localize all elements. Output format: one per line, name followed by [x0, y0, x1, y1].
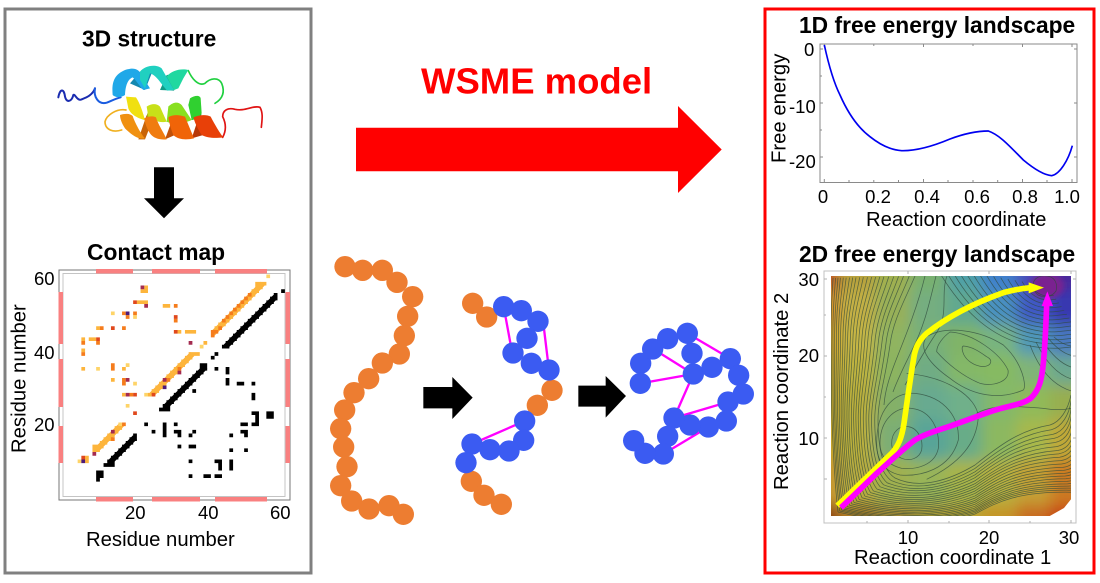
contacts, purple cells [83, 313, 165, 461]
panel: free energy landscapes [738, 9, 1100, 573]
contacts, orange cells [83, 295, 250, 439]
heading: 1D free energy landscape: 1D free energy landscape [799, 12, 1075, 38]
contacts, amber cells [83, 284, 265, 461]
contact map axis labels: 60 [270, 502, 291, 523]
arrow: WSME model big red arrow [356, 106, 722, 193]
1D chart axis labels: 0.8 [1012, 186, 1038, 207]
protein ribbon 3D structure [58, 66, 262, 139]
contacts, light yellow cells [80, 276, 268, 461]
1D chart axis labels: 0.4 [914, 186, 940, 207]
2D chart axis labels: 10 [798, 428, 819, 449]
heading: WSME model: WSME model [421, 60, 652, 102]
2D chart axis labels: 30 [798, 269, 819, 290]
native contacts, black cells [98, 291, 283, 480]
folding chains [330, 256, 754, 525]
1D chart axis labels: 0.2 [865, 186, 891, 207]
2D chart axis labels [771, 269, 1079, 569]
contact band along the diagonal, upper [96, 284, 263, 450]
2D chart axis labels: 20 [798, 345, 819, 366]
chain 3: folded [623, 323, 754, 465]
white cut corner of landscape [1048, 498, 1072, 517]
1D chart axis labels: 0 [804, 39, 814, 60]
contact band along the diagonal, lower [109, 297, 276, 463]
contact map axis labels [8, 268, 291, 551]
contact map axis labels: 20 [125, 502, 146, 523]
heatmap colour field [831, 276, 1071, 516]
arrow: yellow folding pathway [837, 282, 1044, 506]
contour chart: 2D free energy [824, 270, 1076, 524]
contact map axis labels: Residue number [86, 529, 235, 551]
heading: 3D structure: 3D structure [82, 26, 216, 52]
contour lines: energy well at top right [884, 276, 1071, 405]
chain 1: unfolded [330, 256, 423, 525]
1D chart axis labels: Free energy [768, 53, 790, 163]
panel: structure and contact map [5, 9, 311, 573]
2D chart axis labels: Reaction coordinate 2 [771, 293, 793, 490]
1D chart axis labels: 1.0 [1054, 186, 1080, 207]
contour lines: basin and plateau [877, 330, 1071, 479]
contact map axis labels: 40 [34, 342, 55, 363]
1D chart axis labels: -10 [789, 96, 816, 117]
2D chart axis labels: 30 [1059, 527, 1079, 548]
line chart: 1D free energy [820, 44, 1077, 182]
2D chart axis labels: Reaction coordinate 1 [854, 547, 1051, 569]
contact map chart [58, 269, 290, 502]
1D chart axis labels: 0 [818, 186, 828, 207]
1D chart axis labels: 0.6 [964, 186, 990, 207]
arrow: magenta folding pathway [841, 291, 1053, 508]
contact map axis labels: 40 [198, 502, 219, 523]
1D chart axis labels: Reaction coordinate [866, 209, 1046, 231]
arrow: structure to contact map [144, 167, 184, 218]
1D chart axis labels: -20 [789, 151, 816, 172]
heading: Contact map: Contact map [87, 239, 225, 265]
heading: 2D free energy landscape: 2D free energy landscape [799, 241, 1075, 267]
contour lines: bottom flank [838, 395, 1071, 516]
2D chart axis labels: 10 [898, 527, 918, 548]
contact map axis labels: 60 [34, 268, 55, 289]
contacts, red cells [83, 302, 176, 458]
purple energy minimum [1030, 273, 1064, 299]
2D chart axis labels: 20 [979, 527, 999, 548]
contacts, maroon cells [94, 287, 191, 454]
arrow: unfolded to intermediate [423, 377, 473, 419]
contour lines: left flank [831, 276, 916, 512]
1D chart axis labels [768, 39, 1080, 231]
contact map axis labels: Residue number [8, 304, 30, 453]
contact map axis labels: 20 [34, 414, 55, 435]
chain 2: partially folded [455, 293, 563, 515]
arrow: intermediate to folded [578, 376, 626, 418]
